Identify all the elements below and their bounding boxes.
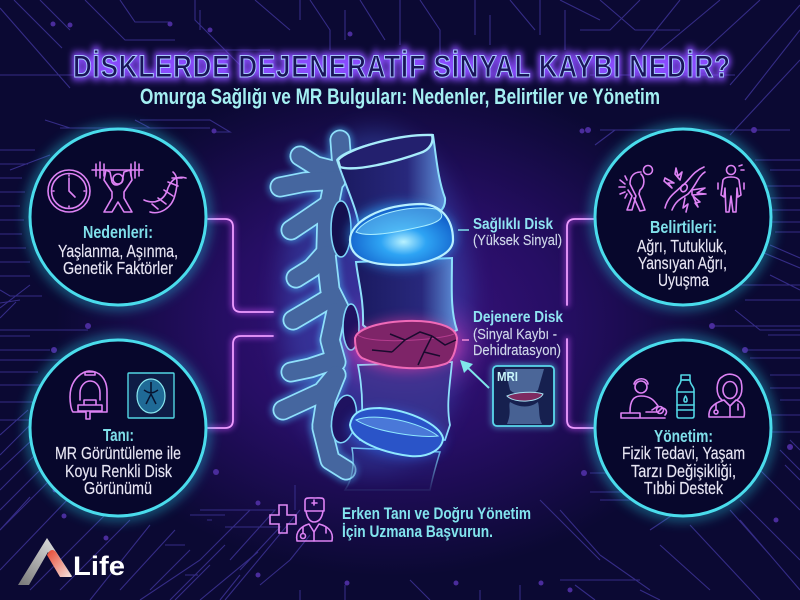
label: healthy disk (458, 216, 562, 249)
lower disk (345, 404, 447, 464)
panel: causes: Nedenleri: (83, 222, 153, 242)
icon: plus (270, 505, 296, 533)
callout: see a specialist: İçin Uzmana Başvurun. (342, 522, 493, 541)
label: degenerated disk (462, 309, 563, 359)
panel: management: Tıbbi Destek (644, 478, 723, 498)
panel: symptoms: Uyuşma (658, 270, 709, 290)
callout: see a specialist (270, 498, 531, 541)
panel: diagnosis: Görünümü (84, 478, 152, 498)
panel: symptoms: Ağrı, Tutukluk, (637, 236, 727, 256)
icon: weightlifter (92, 162, 143, 212)
degenerate disk (353, 319, 459, 371)
panel: management: Yönetim: (654, 426, 713, 446)
label: healthy disk: (Yüksek Sinyal) (473, 232, 562, 249)
panel: symptoms: Yansıyan Ağrı, (638, 253, 727, 273)
panel: diagnosis: Tanı: (103, 425, 134, 445)
panel: symptoms (595, 129, 771, 305)
icon: doctor (297, 498, 332, 541)
heading: title: DİSKLERDE DEJENERATİF SİNYAL KAYBI NEDİR? (73, 49, 730, 85)
label: degenerated disk: Dehidratasyon) (473, 342, 561, 359)
icon: MRI scanner (70, 371, 107, 419)
panel: diagnosis (30, 340, 206, 516)
MRI inset (493, 366, 554, 426)
icon: nerve (664, 167, 706, 212)
spine glow (280, 130, 470, 470)
vertebra bodies (337, 135, 445, 232)
foramen holes (331, 201, 351, 257)
panel: management: Tarzı Değişikliği, (631, 461, 736, 481)
icon: back pain (619, 166, 652, 211)
logo (18, 538, 125, 585)
panel: causes: Genetik Faktörler (63, 258, 173, 278)
connector lines (208, 219, 594, 428)
icon: doctor (709, 374, 744, 417)
healthy disk (349, 204, 455, 268)
label: healthy disk: Sağlıklı Disk (473, 216, 553, 233)
logo: Life (73, 551, 125, 581)
icon: brain scan (128, 373, 174, 418)
icon: clock (48, 170, 90, 212)
panel: symptoms: Belirtileri: (650, 217, 717, 237)
panel: management (595, 340, 771, 516)
MRI inset: MRI (497, 369, 518, 384)
heading: subtitle: Omurga Sağlığı ve MR Bulguları: Nedenler, Belirtiler ve Yönetim (140, 84, 660, 109)
arrow to degenerated disk (460, 360, 489, 388)
label: degenerated disk: (Sinyal Kaybı - (473, 326, 557, 343)
spine illustration (280, 130, 475, 490)
panel: diagnosis: MR Görüntüleme ile (55, 443, 181, 463)
vertebra processes (280, 140, 346, 470)
icon: dna (144, 172, 186, 213)
panel: causes: Yaşlanma, Aşınma, (58, 241, 178, 261)
icon: water bottle (677, 375, 694, 418)
heading: title: DİSKLERDE DEJENERATİF SİNYAL KAYBI NEDİR? (73, 49, 730, 85)
icon: physiotherapist (621, 379, 666, 418)
icon: body with pain points (718, 165, 744, 212)
label: degenerated disk: Dejenere Disk (473, 309, 563, 326)
panel: causes (30, 129, 206, 305)
panel: diagnosis: Koyu Renkli Disk (65, 461, 172, 481)
callout: see a specialist: Erken Tanı ve Doğru Yönetim (342, 504, 531, 523)
panel: management: Fizik Tedavi, Yaşam (622, 443, 745, 463)
